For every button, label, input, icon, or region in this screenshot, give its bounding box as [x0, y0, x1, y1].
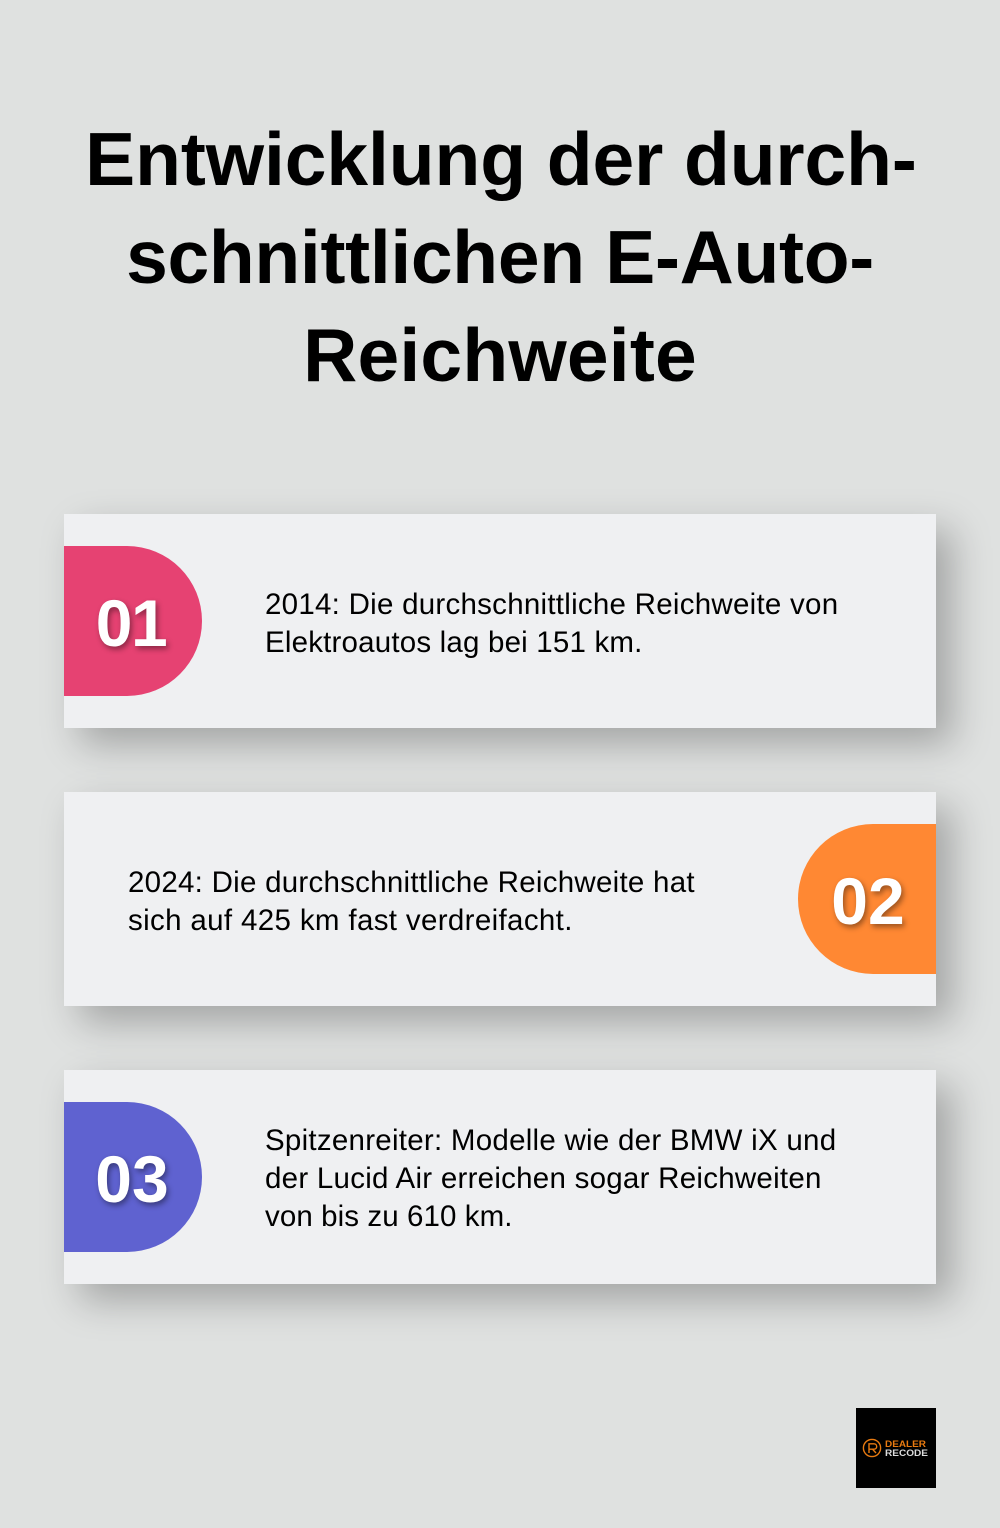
- icon: logo ring: [863, 1439, 881, 1457]
- text: step 02: sich auf 425 km fast verdreifacht.: [128, 904, 573, 937]
- title: [85, 117, 917, 397]
- text: step 03: [265, 1124, 836, 1233]
- text: step 02: 2024: Die durchschnittliche Reichweite hat: [128, 866, 695, 899]
- text: step 01: Elektroautos lag bei 151 km.: [265, 626, 643, 659]
- text: step 03: von bis zu 610 km.: [265, 1200, 513, 1233]
- text: step 01: 2014: Die durchschnittliche Reichweite von: [265, 588, 838, 621]
- logo wordmark: [885, 1439, 928, 1458]
- title: Entwicklung der durch-: [85, 117, 917, 201]
- text: step 03: der Lucid Air erreichen sogar Reichweiten: [265, 1162, 822, 1195]
- logo: Dealer Recode: [856, 1408, 936, 1488]
- title: schnittlichen E-Auto-: [126, 215, 874, 299]
- text: step 01: [265, 588, 838, 659]
- logo wordmark: RECODE: [885, 1448, 928, 1458]
- panel: step 02: [64, 792, 936, 1006]
- badge: 01: [64, 546, 202, 696]
- title: Reichweite: [303, 313, 697, 397]
- badge: 01: 01: [96, 586, 166, 660]
- badge: 02: 02: [831, 864, 905, 938]
- text: step 03: Spitzenreiter: Modelle wie der BMW iX und: [265, 1124, 836, 1157]
- panel: step 03: [64, 1070, 936, 1284]
- panel: step 01: [64, 514, 936, 728]
- badge: 03: 03: [95, 1142, 169, 1216]
- badge: 02: [798, 824, 936, 974]
- badge: 03: [64, 1102, 202, 1252]
- text: step 02: [128, 866, 695, 937]
- logo wordmark: DEALER: [885, 1439, 927, 1449]
